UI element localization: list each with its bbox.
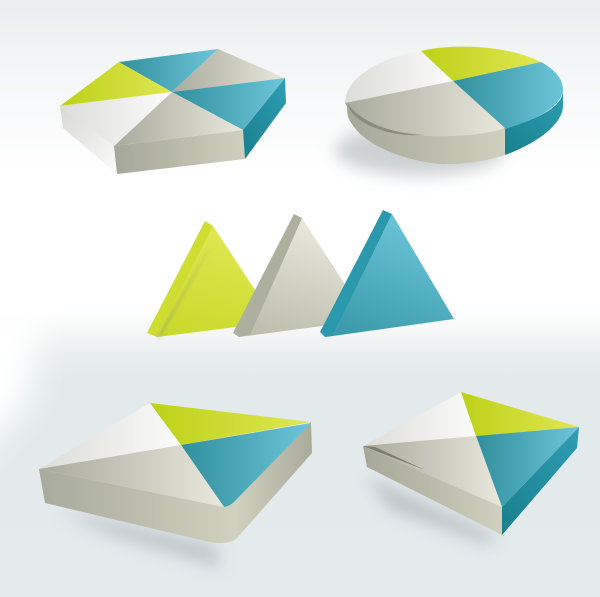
hexagon chart xyxy=(60,49,286,174)
square slice: white xyxy=(39,403,181,469)
pie body grey xyxy=(347,100,505,164)
hexagon slice: grey front xyxy=(114,92,243,146)
rounded square chart xyxy=(39,403,312,568)
pie slice: blue xyxy=(453,62,563,129)
hexagon right side xyxy=(243,78,286,159)
pie slice: white xyxy=(345,51,453,103)
hexagon slice: green xyxy=(60,62,172,106)
diamond shadow xyxy=(365,475,495,545)
square slice: grey xyxy=(39,445,224,507)
pie slice: green xyxy=(421,47,541,81)
diamond chart xyxy=(363,392,579,545)
diamond groove xyxy=(363,446,425,470)
hexagon slice: grey top xyxy=(172,49,285,92)
green triangle xyxy=(147,221,276,337)
diamond slice: green xyxy=(461,392,579,436)
diamond slice: grey xyxy=(363,436,502,507)
triangles xyxy=(147,210,454,337)
grey triangle xyxy=(233,214,368,337)
hexagon slice: white xyxy=(60,92,172,146)
square slice: blue xyxy=(181,423,311,507)
pie chart xyxy=(335,47,563,176)
pie body blue xyxy=(505,90,563,155)
square side grey xyxy=(39,422,312,543)
diamond side grey xyxy=(363,446,502,535)
diamond side blue xyxy=(502,427,579,535)
hexagon slice: blue top xyxy=(119,49,218,92)
hexagon front side xyxy=(114,130,245,174)
hexagon slice: blue right xyxy=(172,78,285,130)
square slice: green xyxy=(150,403,311,445)
square shadow xyxy=(55,508,222,568)
pie slice: grey xyxy=(345,81,505,136)
pie shadow xyxy=(335,124,505,176)
pie groove xyxy=(347,103,425,135)
diamond slice: white xyxy=(363,392,476,446)
hexagon left side xyxy=(60,106,117,174)
diamond slice: blue xyxy=(476,427,579,507)
blue triangle xyxy=(320,210,454,337)
